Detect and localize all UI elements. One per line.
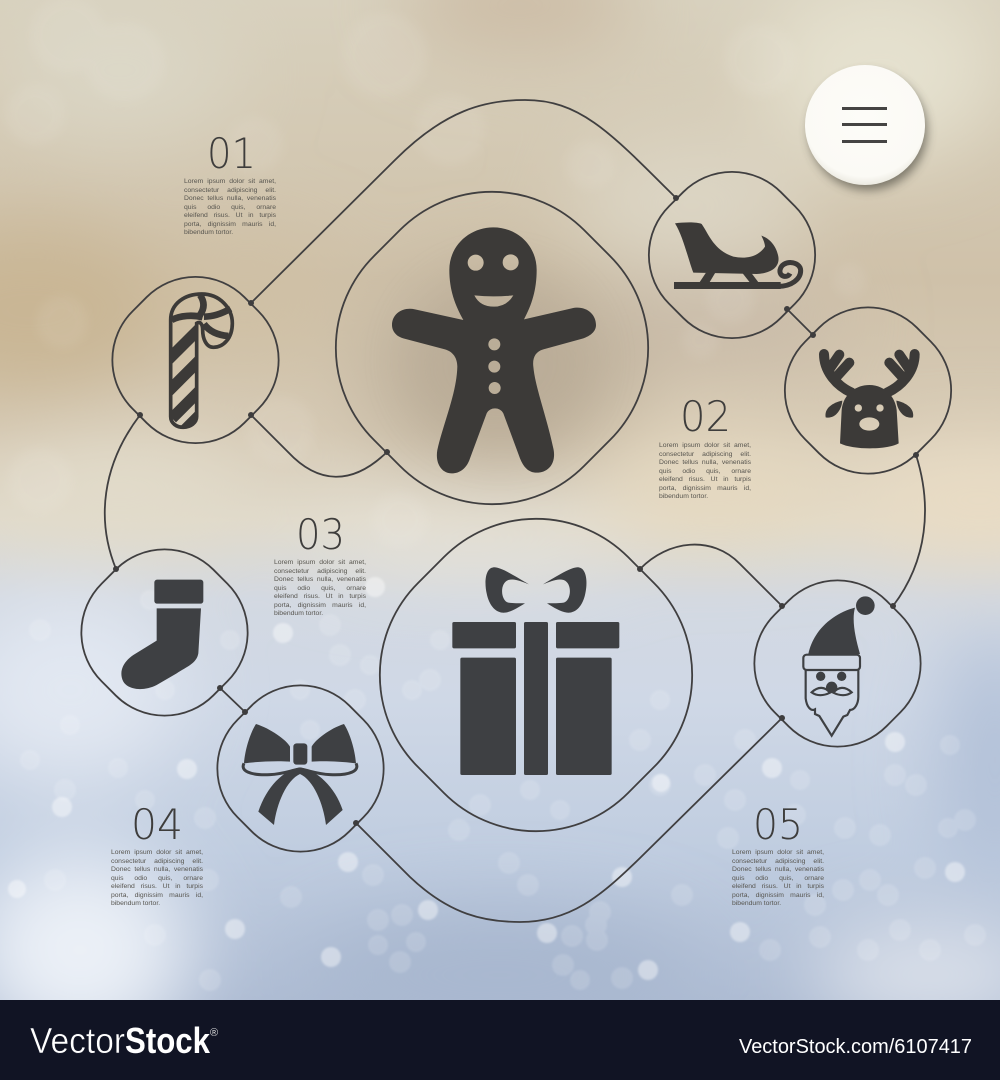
footer logo bold part: Stock	[125, 1020, 211, 1061]
number 03: 03	[296, 510, 345, 559]
text block 03: Donec tellus nulla, venenatis	[274, 576, 366, 583]
frame: reindeer	[756, 279, 980, 502]
text block 02: bibendum tortor.	[659, 493, 708, 500]
icon: gift box	[452, 567, 619, 775]
connector lines between the rounded frames	[105, 100, 925, 922]
frame: stocking	[53, 521, 276, 744]
icon: stocking	[121, 580, 203, 689]
text block 01: Donec tellus nulla, venenatis	[184, 195, 276, 202]
text block 01: consectetur adipiscing elit.	[184, 187, 276, 194]
text block 02: Donec tellus nulla, venenatis	[659, 459, 751, 466]
footer image id: VectorStock.com/6107417	[739, 1036, 972, 1058]
text block 05: Lorem ipsum dolor sit amet,	[732, 849, 824, 856]
frame: large gingerbread frame	[282, 138, 702, 558]
text block 05: eleifend risus. Ut in turpis	[732, 883, 824, 890]
text block 01: eleifend risus. Ut in turpis	[184, 212, 276, 219]
icon: santa head	[803, 596, 875, 736]
footer registered mark: ®	[210, 1027, 218, 1039]
footer logo: Vector	[30, 1020, 125, 1061]
text block 04: porta, dignissim mauris id,	[111, 892, 203, 899]
number 04: 04	[131, 800, 183, 849]
text block 02: eleifend risus. Ut in turpis	[659, 476, 751, 483]
frame: bow	[189, 657, 412, 880]
frame: large gift frame	[326, 465, 746, 885]
text block 05: bibendum tortor.	[732, 900, 781, 907]
text block 02: Lorem ipsum dolor sit amet,	[659, 442, 751, 449]
text block 04: eleifend risus. Ut in turpis	[111, 883, 203, 890]
text block 03: eleifend risus. Ut in turpis	[274, 593, 366, 600]
text block 03: bibendum tortor.	[274, 610, 323, 617]
text block 03: porta, dignissim mauris id,	[274, 602, 366, 609]
icon: sleigh	[674, 222, 801, 289]
text block 02: porta, dignissim mauris id,	[659, 485, 751, 492]
number 02: 02	[680, 392, 731, 441]
icon: candy cane	[171, 294, 232, 427]
text block 03: consectetur adipiscing elit.	[274, 568, 366, 575]
text block 05: Donec tellus nulla, venenatis	[732, 866, 824, 873]
icon: gingerbread man	[392, 227, 596, 473]
frame: sleigh	[620, 143, 844, 367]
text block 03	[274, 559, 366, 617]
text block 01: quis odio quis, ornare	[184, 204, 276, 211]
text block 05: porta, dignissim mauris id,	[732, 892, 824, 899]
text block 03: Lorem ipsum dolor sit amet,	[274, 559, 366, 566]
text block 05	[732, 849, 824, 907]
text block 02: quis odio quis, ornare	[659, 468, 751, 475]
text block 01: porta, dignissim mauris id,	[184, 221, 276, 228]
text block 01: Lorem ipsum dolor sit amet,	[184, 178, 276, 185]
footer band	[0, 1000, 1000, 1080]
text block 02	[659, 442, 751, 500]
text block 04: Donec tellus nulla, venenatis	[111, 866, 203, 873]
text block 03: quis odio quis, ornare	[274, 585, 366, 592]
icon: reindeer	[824, 354, 915, 448]
text block 04: bibendum tortor.	[111, 900, 160, 907]
frame: candy cane	[84, 248, 307, 472]
menu button	[805, 65, 927, 190]
frame: santa	[726, 552, 949, 775]
text block 01: bibendum tortor.	[184, 229, 233, 236]
text block 04: quis odio quis, ornare	[111, 875, 203, 882]
text block 02: consectetur adipiscing elit.	[659, 451, 751, 458]
number 01: 01	[207, 129, 256, 178]
text block 05: consectetur adipiscing elit.	[732, 858, 824, 865]
connector nodes	[113, 195, 919, 826]
number 05: 05	[753, 800, 803, 849]
text block 04	[111, 849, 203, 907]
icon: bow	[243, 724, 357, 825]
text block 01	[184, 178, 276, 236]
text block 05: quis odio quis, ornare	[732, 875, 824, 882]
text block 04: consectetur adipiscing elit.	[111, 858, 203, 865]
text block 04: Lorem ipsum dolor sit amet,	[111, 849, 203, 856]
